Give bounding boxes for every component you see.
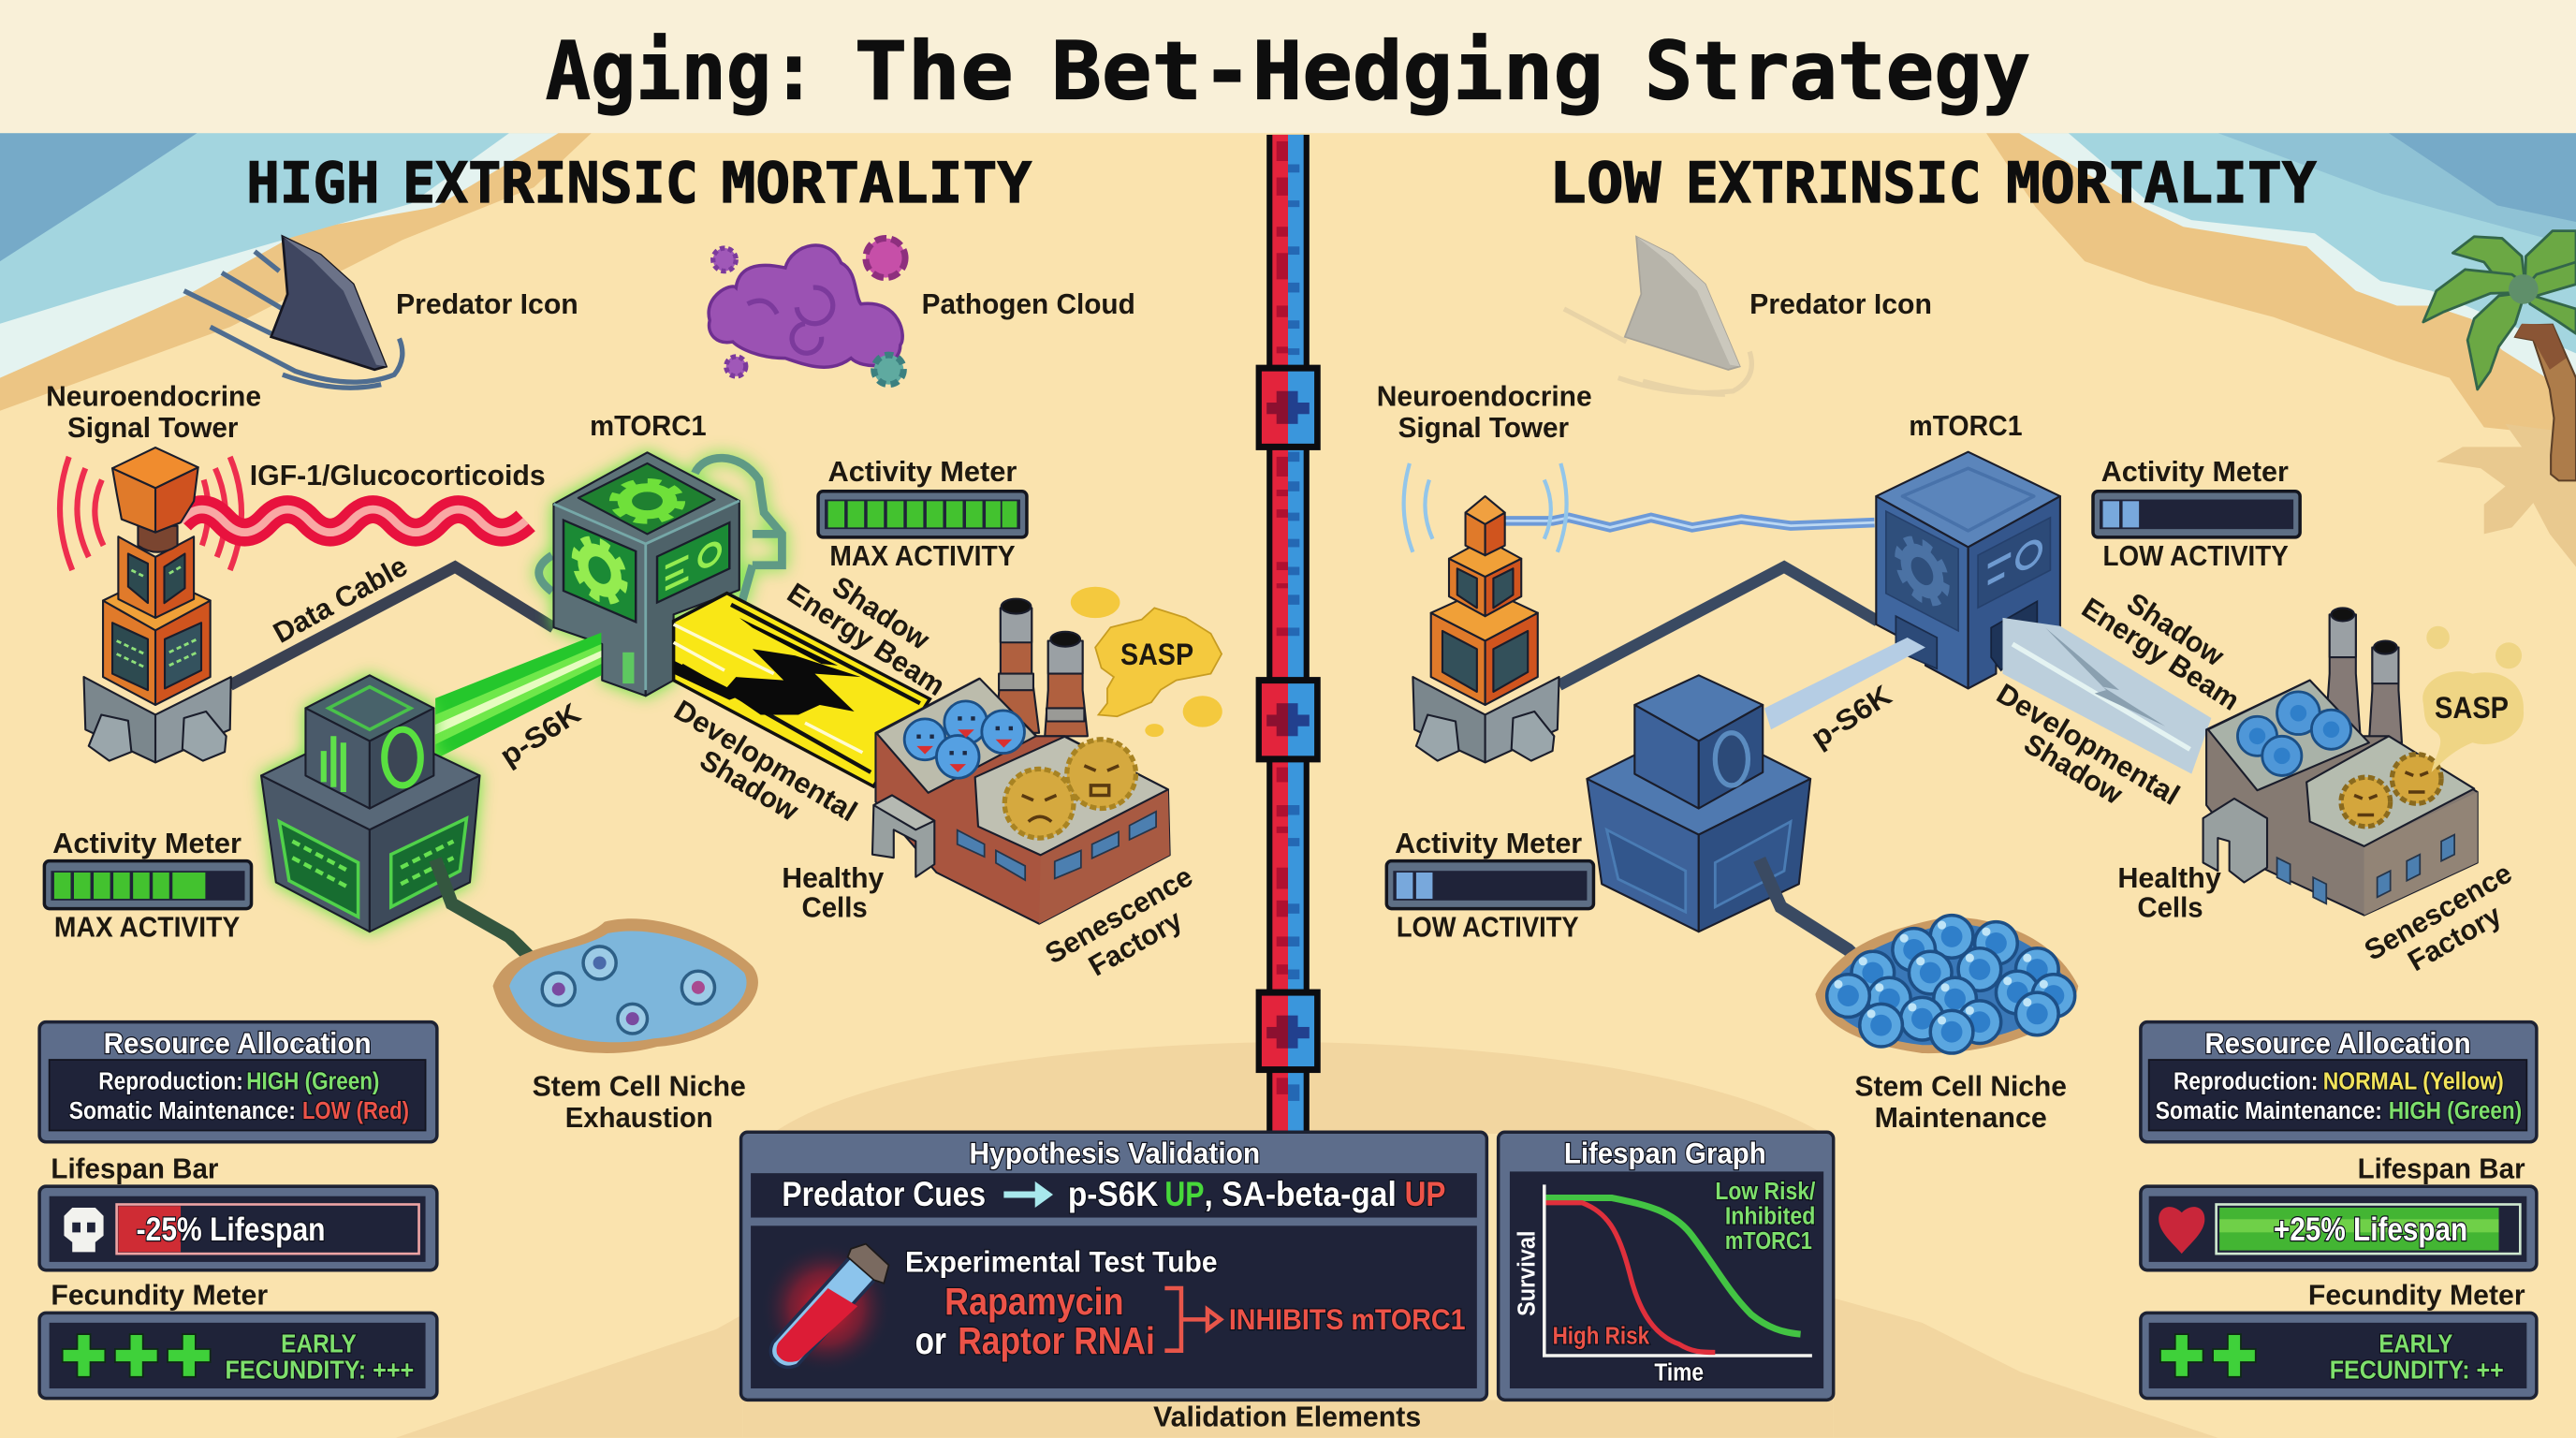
activity meter upper left: MAX ACTIVITY [829, 539, 1016, 572]
heading: low extrinsic mortality: MORTALITY [2006, 152, 2317, 216]
activity meter upper right [2093, 455, 2300, 572]
panel: lifespan graph: Lifespan Graph [1564, 1137, 1766, 1170]
label: healthy cells left [782, 861, 884, 923]
heading: high extrinsic mortality: HIGH [246, 152, 379, 216]
panel: hypothesis validation: UP [1164, 1175, 1204, 1213]
red signal wave [181, 509, 526, 533]
label: stem cell niche exhaustion: Stem Cell Niche [533, 1070, 746, 1103]
activity meter upper right: Activity Meter [2101, 455, 2289, 488]
background: left ocean [0, 133, 592, 411]
chart axes [1544, 1184, 1812, 1356]
senescent cells [2341, 755, 2441, 827]
curve: high risk [1546, 1203, 1715, 1352]
panel: hypothesis validation [741, 1132, 1486, 1400]
palm shadow [2437, 424, 2576, 567]
label: developmental shadow right: Developmental [1991, 677, 2186, 812]
label: fecundity meter right: Fecundity Meter [2308, 1279, 2525, 1312]
panel: lifespan graph [1499, 1132, 1834, 1400]
panel: resource allocation right [2141, 1022, 2537, 1142]
arrow: inhibits bracket [1164, 1288, 1221, 1351]
label: developmental shadow left: Developmental [668, 693, 863, 828]
panel: hypothesis validation: , SA-beta-gal [1204, 1175, 1397, 1213]
panel: resource allocation right: HIGH (Green) [2389, 1096, 2522, 1124]
porch [872, 795, 934, 877]
label: lifespan bar right: Lifespan Bar [2358, 1152, 2525, 1184]
heading: low extrinsic mortality: EXTRINSIC [1686, 152, 1982, 216]
label: neuroendocrine signal tower right [1377, 380, 1592, 444]
walls [875, 679, 1170, 924]
label: shadow energy beam left: Energy Beam [782, 576, 951, 702]
panel: lifespan bar left: -25% Lifespan [137, 1211, 326, 1248]
panel: fecundity meter right: EARLY [2378, 1328, 2453, 1357]
panel: lifespan graph: Survival [1512, 1231, 1540, 1316]
label: senescence factory right: Factory [2402, 898, 2507, 977]
activity meter upper left [818, 455, 1027, 572]
panel: hypothesis validation: INHIBITS mTORC1 [1229, 1302, 1466, 1336]
cable to stem niche left [435, 859, 559, 986]
title: Strategy [1645, 24, 2030, 118]
label: fecundity meter left: Fecundity Meter [51, 1279, 268, 1312]
porch [2203, 799, 2267, 882]
label: senescence factory left: Senescence [1039, 859, 1198, 970]
panel: resource allocation right: Somatic Maintenance: [2156, 1096, 2382, 1124]
panel: resource allocation right: Reproduction: [2174, 1067, 2318, 1095]
blue signal wave [1505, 518, 1875, 527]
windows [958, 812, 1156, 880]
label: validation elements: Validation Elements [1153, 1400, 1421, 1432]
label: stem cell niche maintenance: Maintenance [1875, 1101, 2047, 1134]
label: senescence factory left: Factory [1083, 903, 1188, 982]
label: neuroendocrine signal tower right: Neuroendocrine [1377, 380, 1592, 413]
data cable right [1559, 567, 1878, 685]
label: shadow energy beam right: Energy Beam [2076, 591, 2246, 717]
icon: heart [2159, 1207, 2204, 1254]
panel: lifespan graph: mTORC1 [1725, 1226, 1812, 1255]
icon: palm tree [2423, 231, 2576, 480]
label: p-S6K right: p-S6K [1805, 679, 1897, 755]
panel: resource allocation left: Somatic Maintenance: [69, 1096, 296, 1124]
activity meter lower right: Activity Meter [1395, 827, 1582, 859]
panel: hypothesis validation: Raptor RNAi [958, 1319, 1155, 1362]
panel: lifespan graph: Time [1654, 1357, 1704, 1386]
panel: resource allocation left: HIGH (Green) [246, 1067, 379, 1095]
title: Aging: [546, 24, 816, 118]
heading: high extrinsic mortality: EXTRINSIC [402, 152, 698, 216]
label: healthy cells left: Cells [801, 890, 868, 923]
heading: high extrinsic mortality [246, 152, 1032, 216]
p-S6K beam right [1764, 638, 1925, 729]
cable to stem niche right [1760, 859, 1868, 970]
panel: resource allocation left: Resource Allocation [104, 1026, 372, 1060]
icon: senescence factory left [872, 599, 1170, 924]
stem cell niche maintenance [1815, 916, 2078, 1053]
roof panels [2208, 681, 2369, 790]
panel: lifespan graph: Low Risk/ [1715, 1177, 1816, 1205]
SASP cloud right [2422, 626, 2524, 772]
senescent cells [1004, 740, 1135, 838]
label: healthy cells left: Healthy [782, 861, 884, 894]
panel: lifespan graph: Inhibited [1725, 1202, 1815, 1230]
label: healthy cells right [2117, 861, 2221, 923]
panel: lifespan bar right: +25% Lifespan [2274, 1211, 2467, 1248]
label: predator icon left: Predator Icon [396, 287, 578, 320]
panel: resource allocation right: NORMAL (Yellow) [2323, 1067, 2504, 1095]
panel: hypothesis validation: Experimental Test Tube [905, 1244, 1218, 1278]
smokestacks [996, 599, 1088, 736]
background: right ocean [1986, 133, 2576, 437]
panel: resource allocation right: Resource Allocation [2204, 1026, 2471, 1060]
smokestacks [2324, 608, 2402, 742]
panel: fecundity meter right [2141, 1313, 2537, 1399]
icon: mTORC1 cube left [539, 452, 782, 696]
panel: hypothesis validation: p-S6K [1068, 1175, 1159, 1213]
panel: fecundity meter left: EARLY [281, 1328, 357, 1357]
label: healthy cells right: Cells [2137, 890, 2203, 923]
arrow: predator cues [1003, 1181, 1053, 1208]
label: stem cell niche exhaustion: Exhaustion [565, 1101, 713, 1134]
central divider bar [1256, 135, 1321, 1134]
activity meter lower left [44, 827, 252, 943]
icon: lower machine right [1587, 675, 1810, 932]
label: data cable left: Data Cable [268, 550, 413, 650]
panel: lifespan graph: High Risk [1553, 1322, 1649, 1350]
icon: skull [64, 1208, 104, 1252]
label: igf-1 glucocorticoids: IGF-1/Glucocorticoids [250, 459, 546, 492]
icon: mTORC1 cube right [1876, 452, 2060, 688]
label: stem cell niche maintenance [1855, 1070, 2067, 1134]
p-S6K green beam left [435, 633, 601, 759]
panel: lifespan bar right [2141, 1186, 2537, 1270]
activity meter lower right: LOW ACTIVITY [1397, 910, 1579, 943]
activity meter lower left: Activity Meter [52, 827, 242, 859]
label: stem cell niche maintenance: Stem Cell Niche [1855, 1070, 2067, 1103]
healthy cells [904, 701, 1024, 778]
icon: senescence factory right [2203, 608, 2478, 916]
panel: hypothesis validation: Hypothesis Validation [970, 1137, 1260, 1170]
SASP cloud left [1071, 587, 1222, 737]
title band [0, 0, 2576, 133]
panel: hypothesis validation: Predator Cues [782, 1175, 986, 1213]
activity meter upper right: LOW ACTIVITY [2103, 539, 2289, 572]
label: mtorc1 left: mTORC1 [590, 409, 707, 442]
icon: signal tower left [84, 448, 231, 762]
label: predator icon right: Predator Icon [1749, 287, 1932, 320]
label: stem cell niche exhaustion [533, 1070, 746, 1134]
label: developmental shadow right: Shadow [2018, 726, 2129, 811]
icon: pathogen cloud [709, 238, 905, 385]
SASP cloud right: SASP [2435, 691, 2509, 725]
panel: lifespan bar left [39, 1186, 437, 1270]
label: neuroendocrine signal tower left: Signal Tower [67, 411, 239, 444]
curve: low risk [1546, 1197, 1801, 1334]
panel: fecundity meter right: FECUNDITY: ++ [2330, 1356, 2504, 1385]
icon: lower machine left [261, 675, 479, 932]
walls [2206, 681, 2478, 916]
data cable left [230, 567, 553, 685]
panel: resource allocation left [39, 1022, 437, 1142]
panel: resource allocation left: Reproduction: [98, 1067, 243, 1095]
icon: test tube [761, 1242, 892, 1373]
icon: signal tower right [1412, 496, 1559, 762]
panel: fecundity meter left [39, 1313, 437, 1399]
label: neuroendocrine signal tower right: Signal Tower [1398, 411, 1569, 444]
title: Bet-Hedging [1051, 24, 1603, 118]
label: p-S6K left: p-S6K [494, 697, 586, 772]
shadow energy beam yellow [674, 594, 929, 786]
heading: low extrinsic mortality [1549, 152, 2317, 216]
activity meter lower right [1386, 827, 1593, 943]
roof panels [877, 679, 1036, 793]
icon: predator fin left [184, 237, 402, 388]
activity meter lower left: MAX ACTIVITY [54, 910, 240, 943]
label: neuroendocrine signal tower left: Neuroendocrine [46, 380, 261, 413]
panel: hypothesis validation: or [915, 1319, 946, 1362]
windows [2277, 835, 2454, 903]
panel: hypothesis validation: UP [1405, 1175, 1445, 1213]
title [546, 24, 2030, 118]
label: lifespan bar left: Lifespan Bar [51, 1152, 218, 1184]
title: The [855, 24, 1014, 118]
label: shadow energy beam left: Shadow [827, 569, 935, 656]
signal arcs right [1404, 463, 1567, 552]
panel: fecundity meter left: FECUNDITY: +++ [225, 1356, 414, 1385]
signal arcs left [60, 457, 242, 570]
SASP cloud left: SASP [1120, 638, 1193, 671]
label: neuroendocrine signal tower left [46, 380, 261, 444]
stem cell niche exhausted [493, 918, 758, 1053]
healthy cells [2237, 692, 2351, 775]
heading: high extrinsic mortality: MORTALITY [721, 152, 1032, 216]
activity meter upper left: Activity Meter [828, 455, 1017, 488]
label: healthy cells right: Healthy [2117, 861, 2221, 894]
icon: predator fin right [1564, 237, 1751, 394]
label: mtorc1 right: mTORC1 [1909, 409, 2023, 442]
background: sand patches [396, 1042, 2217, 1438]
heading: low extrinsic mortality: LOW [1549, 152, 1661, 216]
shadow energy beam pale [2002, 618, 2211, 774]
label: senescence factory right: Senescence [2359, 857, 2517, 967]
panel: resource allocation left: LOW (Red) [302, 1096, 409, 1124]
panel: hypothesis validation: Rapamycin [944, 1280, 1123, 1323]
label: pathogen cloud: Pathogen Cloud [922, 287, 1135, 320]
label: developmental shadow left: Shadow [695, 743, 804, 828]
label: shadow energy beam right: Shadow [2121, 586, 2230, 672]
